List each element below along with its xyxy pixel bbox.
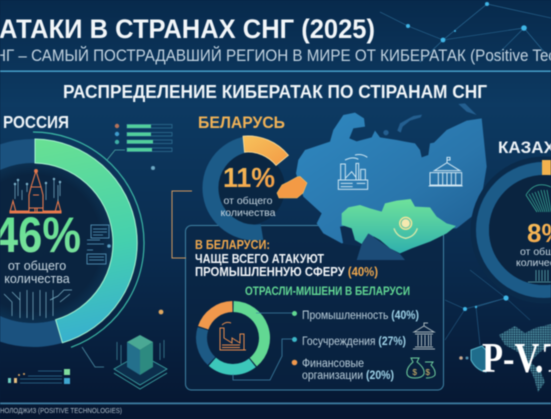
icon: chat and keyboard <box>87 225 110 264</box>
leader line bottom <box>82 347 104 367</box>
ring outline: Kazakhstan <box>473 159 551 301</box>
icon: Baiterek tower base <box>528 270 551 282</box>
legend: finance: организации (20%) <box>302 370 394 382</box>
legend: finance <box>292 358 394 382</box>
map: Central Asia <box>357 233 405 260</box>
legend: industry: Промышленность (40%) <box>302 310 419 322</box>
panel: Belarus ring <box>198 113 307 233</box>
text: In Belarus: В БЕЛАРУСИ: <box>195 238 270 252</box>
label: Belarus: БЕЛАРУСЬ <box>198 113 285 132</box>
icon: Baiterek tower top <box>526 185 551 212</box>
panel border: Belarus details <box>186 226 444 390</box>
legend: finance: Финансовые <box>302 358 364 370</box>
circuit pattern <box>4 290 72 320</box>
leader line top <box>107 150 125 160</box>
inner disc: Kazakhstan <box>489 175 551 285</box>
title: АТАКИ В СТРАНАХ СНГ (2025) <box>0 14 375 44</box>
connector lines <box>233 313 292 380</box>
dot: teal <box>151 166 155 170</box>
map: Belarus <box>277 176 307 198</box>
legend bars top <box>115 124 172 152</box>
map: Novaya Zemlya and islands <box>383 103 477 135</box>
value: 11%: 11% <box>223 162 275 193</box>
footer source: НОЛОДЖИЗ (POSITIVE TECHNOLOGIES) <box>0 408 122 415</box>
icon: factory in donut <box>220 322 246 350</box>
ring base: Belarus <box>210 144 262 233</box>
ring segment: Kazakhstan 8% <box>542 160 551 175</box>
legend: government: Госучреждения (27%) <box>302 336 406 348</box>
panel: Russia <box>0 112 144 347</box>
constellation network top right <box>380 2 551 62</box>
icon: shield <box>471 346 486 372</box>
text: industry line: ПРОМЫШЛЕННУЮ СФЕРУ (40%) <box>195 265 378 279</box>
caption: Belarus: от общего <box>224 195 273 207</box>
world map <box>499 324 551 392</box>
ring segment: Russia 46% <box>35 139 137 343</box>
ring base: Kazakhstan <box>482 168 551 292</box>
constellation network bottom right <box>445 270 530 345</box>
connector to Belarus panel <box>172 191 192 258</box>
panel content: Belarus details <box>195 238 435 382</box>
icon: money bags <box>407 358 435 378</box>
heading: target sectors: ОТРАСЛИ-МИШЕНИ В БЕЛАРУСИ <box>245 286 410 298</box>
dot: orange <box>159 310 163 314</box>
text: most attacked: ЧАЩЕ ВСЕГО АТАКУЮТ <box>195 252 324 266</box>
icon: Kremlin <box>10 170 61 213</box>
caption line 2: Belarus: количества <box>221 207 276 219</box>
icon: factory <box>338 155 368 189</box>
map: Caspian sea <box>340 224 362 247</box>
money sign right: $ <box>426 368 430 377</box>
donut chart <box>202 306 265 369</box>
inner disc: Belarus <box>211 151 285 225</box>
icon: bank <box>413 323 435 349</box>
icon: Kazakhstan emblem <box>394 217 417 238</box>
ring segment: Belarus 11% <box>243 136 288 165</box>
icon: government building <box>429 157 463 186</box>
caption line 2: Russia: количества <box>4 272 70 286</box>
ring base: Russia <box>0 151 125 335</box>
dots beside shield <box>459 356 468 360</box>
icon: server tower <box>114 335 167 389</box>
caption: Russia: от общего <box>8 259 66 273</box>
map: Kazakhstan <box>342 199 456 253</box>
icon: antenna lines <box>14 178 61 201</box>
label: Russia: РОССИЯ <box>3 112 69 132</box>
legend bars bottom left <box>8 369 70 384</box>
money sign left: $ <box>412 368 418 377</box>
panel: Kazakhstan ring <box>473 138 551 301</box>
map of CIS <box>296 103 487 260</box>
section heading: РАСПРЕДЕЛЕНИЕ КИБЕРАТАК ПО СТIРАНАМ СНГ <box>63 82 487 102</box>
outer thin arc: Russia <box>33 132 144 347</box>
map: Russia <box>296 113 487 243</box>
inner disc: Russia <box>0 163 113 323</box>
